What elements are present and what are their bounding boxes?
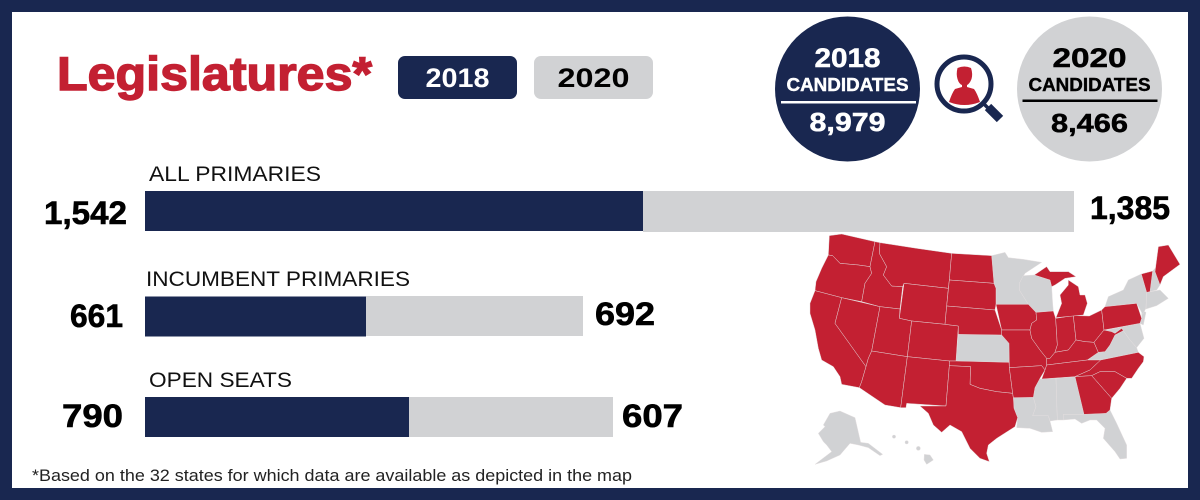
panel: 2020 candidates: 2020 <box>1052 43 1126 73</box>
legend: 2018: 2018 <box>426 63 490 93</box>
icon: magnifying glass with person <box>937 57 1000 119</box>
bar chart: incumbent primaries <box>70 268 655 336</box>
panel: 2018 candidates: 8,979 <box>810 107 886 137</box>
legend: 2020: 2020 <box>558 63 630 93</box>
bar chart: open seats: 790 <box>62 398 123 434</box>
bar chart: incumbent primaries: 661 <box>70 298 123 334</box>
panel: 2018 candidates: CANDIDATES <box>786 75 908 95</box>
states with data (red) <box>810 234 1180 462</box>
bar chart: all primaries: 1,385 <box>1090 190 1170 226</box>
bar chart: incumbent primaries: INCUMBENT PRIMARIES <box>146 268 410 291</box>
states without data (grey) <box>815 252 1168 464</box>
bar chart: all primaries <box>44 163 1170 232</box>
panel: 2018 candidates: 2018 <box>814 43 880 73</box>
Hawaii <box>892 435 933 464</box>
map of United States <box>810 234 1180 464</box>
footnote: *Based on the 32 states for which data are available as depicted in the map <box>32 467 632 485</box>
bar chart: all primaries: ALL PRIMARIES <box>149 163 321 186</box>
Michigan <box>1034 267 1087 318</box>
bar chart: open seats: OPEN SEATS <box>149 369 292 392</box>
bar chart: open seats: 607 <box>622 398 683 434</box>
panel: 2020 candidates <box>1017 16 1162 162</box>
panel: 2018 candidates <box>775 16 920 162</box>
legend <box>398 56 653 99</box>
legend: 2020 <box>534 56 653 99</box>
legend: 2018 <box>398 56 517 99</box>
bar chart: open seats <box>62 369 683 437</box>
title: Legislatures* <box>57 47 373 100</box>
bar chart: incumbent primaries: 692 <box>595 296 655 332</box>
bar chart: all primaries: 1,542 <box>44 195 127 231</box>
panel: 2020 candidates: 8,466 <box>1051 108 1128 138</box>
Alaska <box>815 411 883 464</box>
panel: 2020 candidates: CANDIDATES <box>1028 75 1150 95</box>
